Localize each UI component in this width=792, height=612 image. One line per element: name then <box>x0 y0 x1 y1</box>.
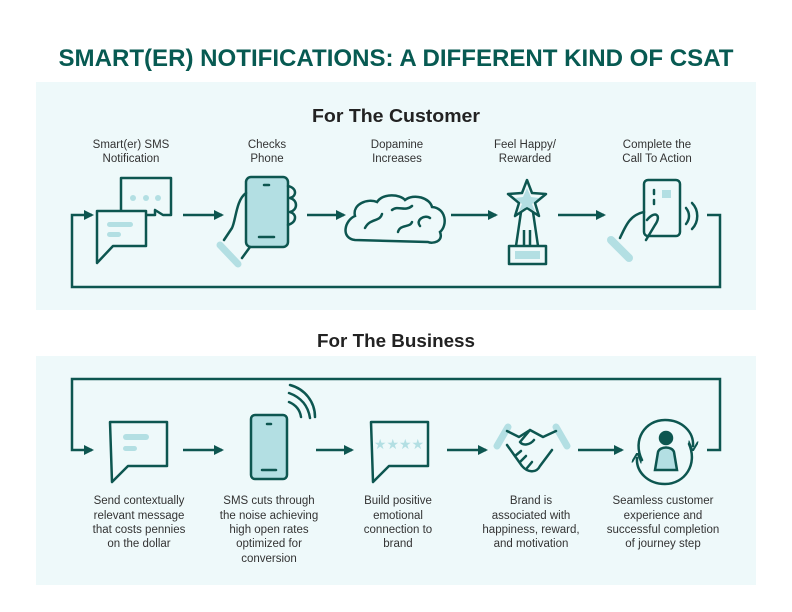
step labels: business: Send contextually <box>94 495 185 507</box>
step labels: customer: Call To Action <box>622 153 692 165</box>
icon: rating bubble: ★★★★ <box>374 436 424 452</box>
step labels: business: happiness, reward, <box>482 524 580 536</box>
icon: handshake <box>497 427 567 471</box>
icon: message bubble <box>110 422 167 482</box>
step labels: customer: Feel Happy/ <box>494 139 557 151</box>
step labels: customer: Checks <box>248 139 286 151</box>
icon: phone with signal <box>251 385 315 479</box>
step labels: business: associated with <box>492 510 570 522</box>
icon: trophy <box>508 180 546 264</box>
step labels: customer <box>93 139 692 165</box>
step labels: business: connection to <box>364 524 432 536</box>
heading: business: For The Business <box>317 331 475 351</box>
step labels: business: Brand is <box>510 495 552 507</box>
step labels: business: conversion <box>241 553 297 565</box>
panel: customer <box>36 82 756 310</box>
step labels: customer: Smart(er) SMS <box>93 139 170 151</box>
step labels: business: emotional <box>373 510 423 522</box>
step labels: customer: Phone <box>250 153 284 165</box>
step labels: business: experience and <box>624 510 702 522</box>
icon: customer cycle <box>637 420 693 484</box>
step labels: business: and motivation <box>494 538 568 550</box>
step labels: business: relevant message <box>94 510 184 522</box>
step labels: business: that costs pennies <box>93 524 186 536</box>
icon: hand with card <box>611 180 697 258</box>
step labels: business <box>93 495 719 565</box>
step labels: customer: Notification <box>103 153 159 165</box>
arrows: business <box>183 449 622 451</box>
loop arrow: customer <box>72 215 720 287</box>
loop arrow: business <box>72 379 720 450</box>
step labels: business: brand <box>383 538 413 550</box>
step labels: business: optimized for <box>236 538 302 550</box>
step labels: customer: Rewarded <box>499 153 551 165</box>
icon: rating bubble <box>371 422 428 482</box>
step labels: customer: Complete the <box>623 139 691 151</box>
arrows: customer <box>183 214 604 216</box>
panel: business <box>36 331 756 585</box>
step labels: business: on the dollar <box>107 538 171 550</box>
step labels: business: Seamless customer <box>613 495 714 507</box>
title: SMART(ER) NOTIFICATIONS: A DIFFERENT KIND OF CSAT <box>58 45 734 72</box>
heading: customer: For The Customer <box>312 106 480 126</box>
step labels: business: successful completion <box>607 524 719 536</box>
icon: chat bubbles <box>97 178 171 263</box>
icon: brain <box>346 195 445 243</box>
step labels: business: Build positive <box>364 495 432 507</box>
step labels: customer: Dopamine <box>371 139 423 151</box>
step labels: business: SMS cuts through <box>223 495 315 507</box>
step labels: customer: Increases <box>372 153 422 165</box>
step labels: business: of journey step <box>625 538 701 550</box>
icon: hand with phone <box>220 177 296 264</box>
step labels: business: high open rates <box>229 524 309 536</box>
step labels: business: the noise achieving <box>220 510 318 522</box>
